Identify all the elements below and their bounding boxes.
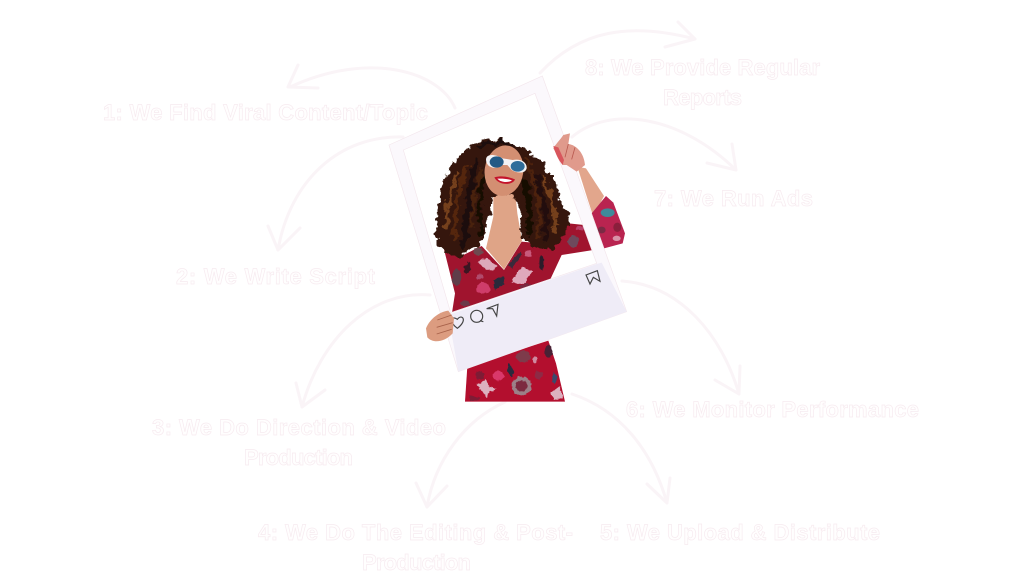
upper dress xyxy=(443,223,593,315)
text: step 4: 4: We Do The Editing & Post- xyxy=(258,520,573,545)
text: step 7: 7: We Run Ads xyxy=(654,186,813,211)
text: step 3: 3: We Do Direction & Video xyxy=(152,415,446,440)
text: step 5: 5: We Upload & Distribute xyxy=(600,520,880,545)
text: step 8: 8: We Provide Regular xyxy=(585,55,820,80)
arrow: to step 1 xyxy=(288,65,455,108)
arrow: to step 7 xyxy=(572,119,736,170)
frame bottom band xyxy=(448,263,627,372)
sleeve xyxy=(592,196,625,248)
text: step 2: 2: We Write Script xyxy=(176,264,376,289)
arrow: to step 4 xyxy=(416,402,505,507)
text: step 8 xyxy=(585,55,820,110)
text: step 3: Production xyxy=(244,445,353,470)
arrow: to step 6 xyxy=(622,281,740,394)
icon: send xyxy=(487,304,498,316)
sunglasses xyxy=(486,155,527,173)
lower dress xyxy=(465,341,565,402)
photo frame xyxy=(389,76,627,372)
icon: heart xyxy=(452,317,463,328)
text: step 1: 1: We Find Viral Content/Topic xyxy=(103,100,428,125)
icon: bookmark xyxy=(586,271,600,284)
right hand xyxy=(553,133,585,172)
text: step 4 xyxy=(258,520,573,575)
arrow: to step 8 xyxy=(540,22,695,73)
woman holding social media frame xyxy=(389,76,627,402)
arrow: to step 2 xyxy=(268,137,403,250)
icon: comment xyxy=(471,310,483,322)
arrow: to step 5 xyxy=(572,394,670,503)
hair xyxy=(436,139,569,257)
text: step 8: Reports xyxy=(663,85,742,110)
raised forearm xyxy=(577,167,604,217)
mouth xyxy=(494,176,515,184)
text: step 4: Production xyxy=(362,550,471,575)
text: step 6: 6: We Monitor Performance xyxy=(626,397,919,422)
arrow: to step 3 xyxy=(296,295,430,407)
left hand xyxy=(426,311,454,341)
neck and chest xyxy=(486,190,522,269)
face xyxy=(481,143,527,198)
text: step 3 xyxy=(152,415,446,470)
